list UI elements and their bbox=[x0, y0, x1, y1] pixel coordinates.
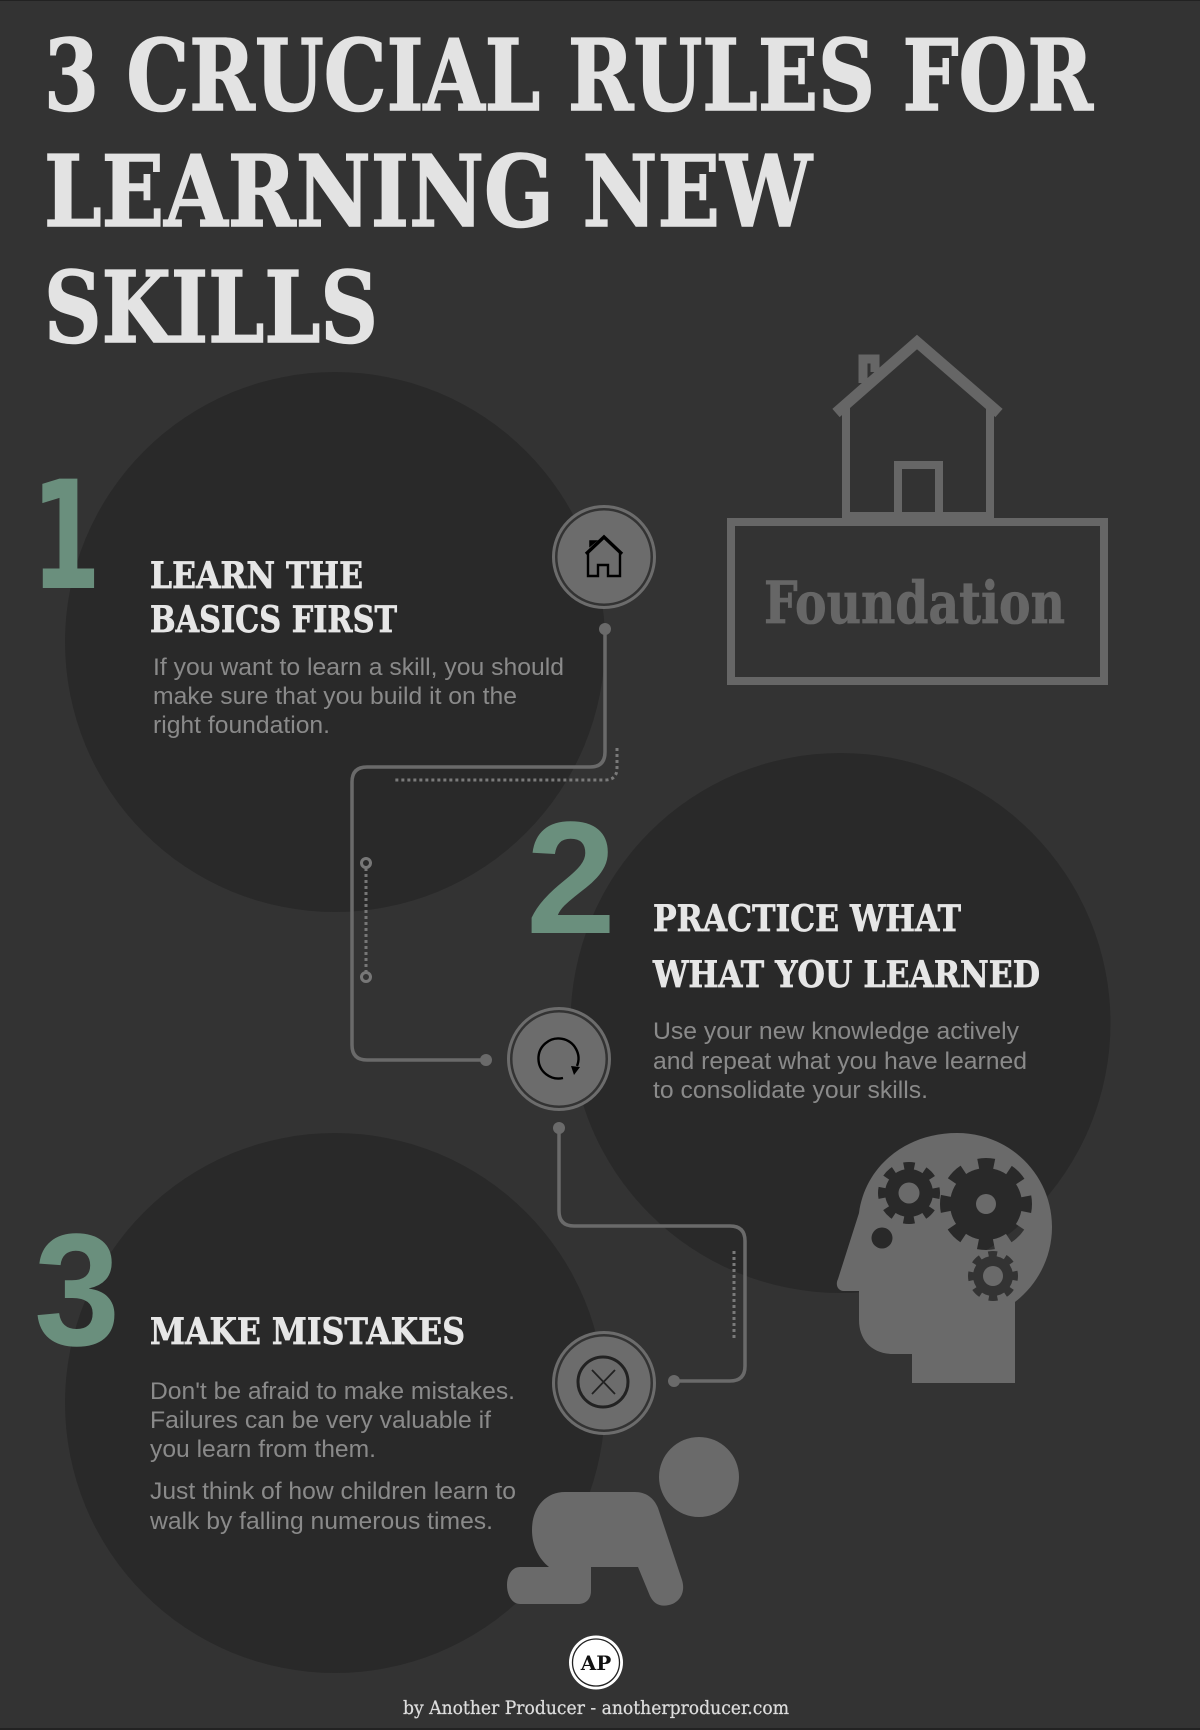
number 1: 1 bbox=[31, 450, 101, 624]
text: step 3 body bbox=[149, 1378, 516, 1535]
text: step 1 body: make sure that you build it on the bbox=[153, 683, 517, 710]
connector: dotted accent line 1 bbox=[393, 748, 617, 780]
icon: cross node bbox=[554, 1332, 654, 1434]
footer credit: by Another Producer - anotherproducer.com bbox=[403, 1698, 789, 1719]
connector: step 1 to step 2 bbox=[352, 623, 611, 1066]
text: step 3 body: walk by falling numerous times. bbox=[149, 1508, 493, 1535]
text: step 1 body: If you want to learn a skill, you should bbox=[153, 654, 564, 681]
text: step 3 body: Don't be afraid to make mistakes. bbox=[150, 1378, 515, 1405]
text: step 1 body bbox=[153, 654, 564, 739]
icon: home node bbox=[554, 506, 654, 608]
title: SKILLS bbox=[44, 251, 378, 366]
heading: step 2: PRACTICE WHAT bbox=[653, 898, 961, 940]
connector: dotted accent line 3 bbox=[732, 1251, 736, 1340]
text: step 3 body: Just think of how children learn to bbox=[150, 1478, 516, 1505]
label: Foundation: Foundation bbox=[764, 569, 1065, 637]
number 3: 3 bbox=[34, 1200, 120, 1379]
title bbox=[44, 19, 1094, 366]
panel: background circle 3 bbox=[65, 1133, 605, 1673]
heading: step 1 bbox=[150, 555, 397, 641]
icon: house on foundation bbox=[731, 342, 1104, 681]
heading: step 3: MAKE MISTAKES bbox=[150, 1311, 465, 1353]
heading: step 2 bbox=[652, 898, 1040, 996]
heading: step 1: LEARN THE bbox=[150, 555, 363, 597]
text: step 3 body: you learn from them. bbox=[150, 1436, 376, 1463]
text: step 1 body: right foundation. bbox=[153, 712, 330, 739]
text: step 2 body: to consolidate your skills. bbox=[653, 1077, 928, 1104]
panel: background circle 1 bbox=[65, 372, 605, 912]
connector: dotted accent line 2 bbox=[362, 858, 370, 982]
icon: crawling baby bbox=[507, 1437, 739, 1606]
logo: AP badge bbox=[569, 1636, 623, 1690]
panel: background circle 2 bbox=[570, 753, 1110, 1293]
logo: AP badge: AP bbox=[580, 1651, 611, 1675]
heading: step 2: WHAT YOU LEARNED bbox=[652, 954, 1040, 996]
text: step 2 body: and repeat what you have learned bbox=[653, 1048, 1027, 1075]
number 2: 2 bbox=[526, 788, 616, 967]
icon: repeat node bbox=[508, 1008, 610, 1110]
connector: step 2 to step 3 bbox=[553, 1122, 745, 1387]
text: step 2 body bbox=[653, 1018, 1027, 1104]
icon: head with gears bbox=[836, 1133, 1052, 1383]
text: step 2 body: Use your new knowledge actively bbox=[653, 1018, 1019, 1045]
text: step 3 body: Failures can be very valuable if bbox=[150, 1407, 491, 1434]
heading: step 1: BASICS FIRST bbox=[150, 599, 397, 641]
title: LEARNING NEW bbox=[44, 135, 814, 250]
